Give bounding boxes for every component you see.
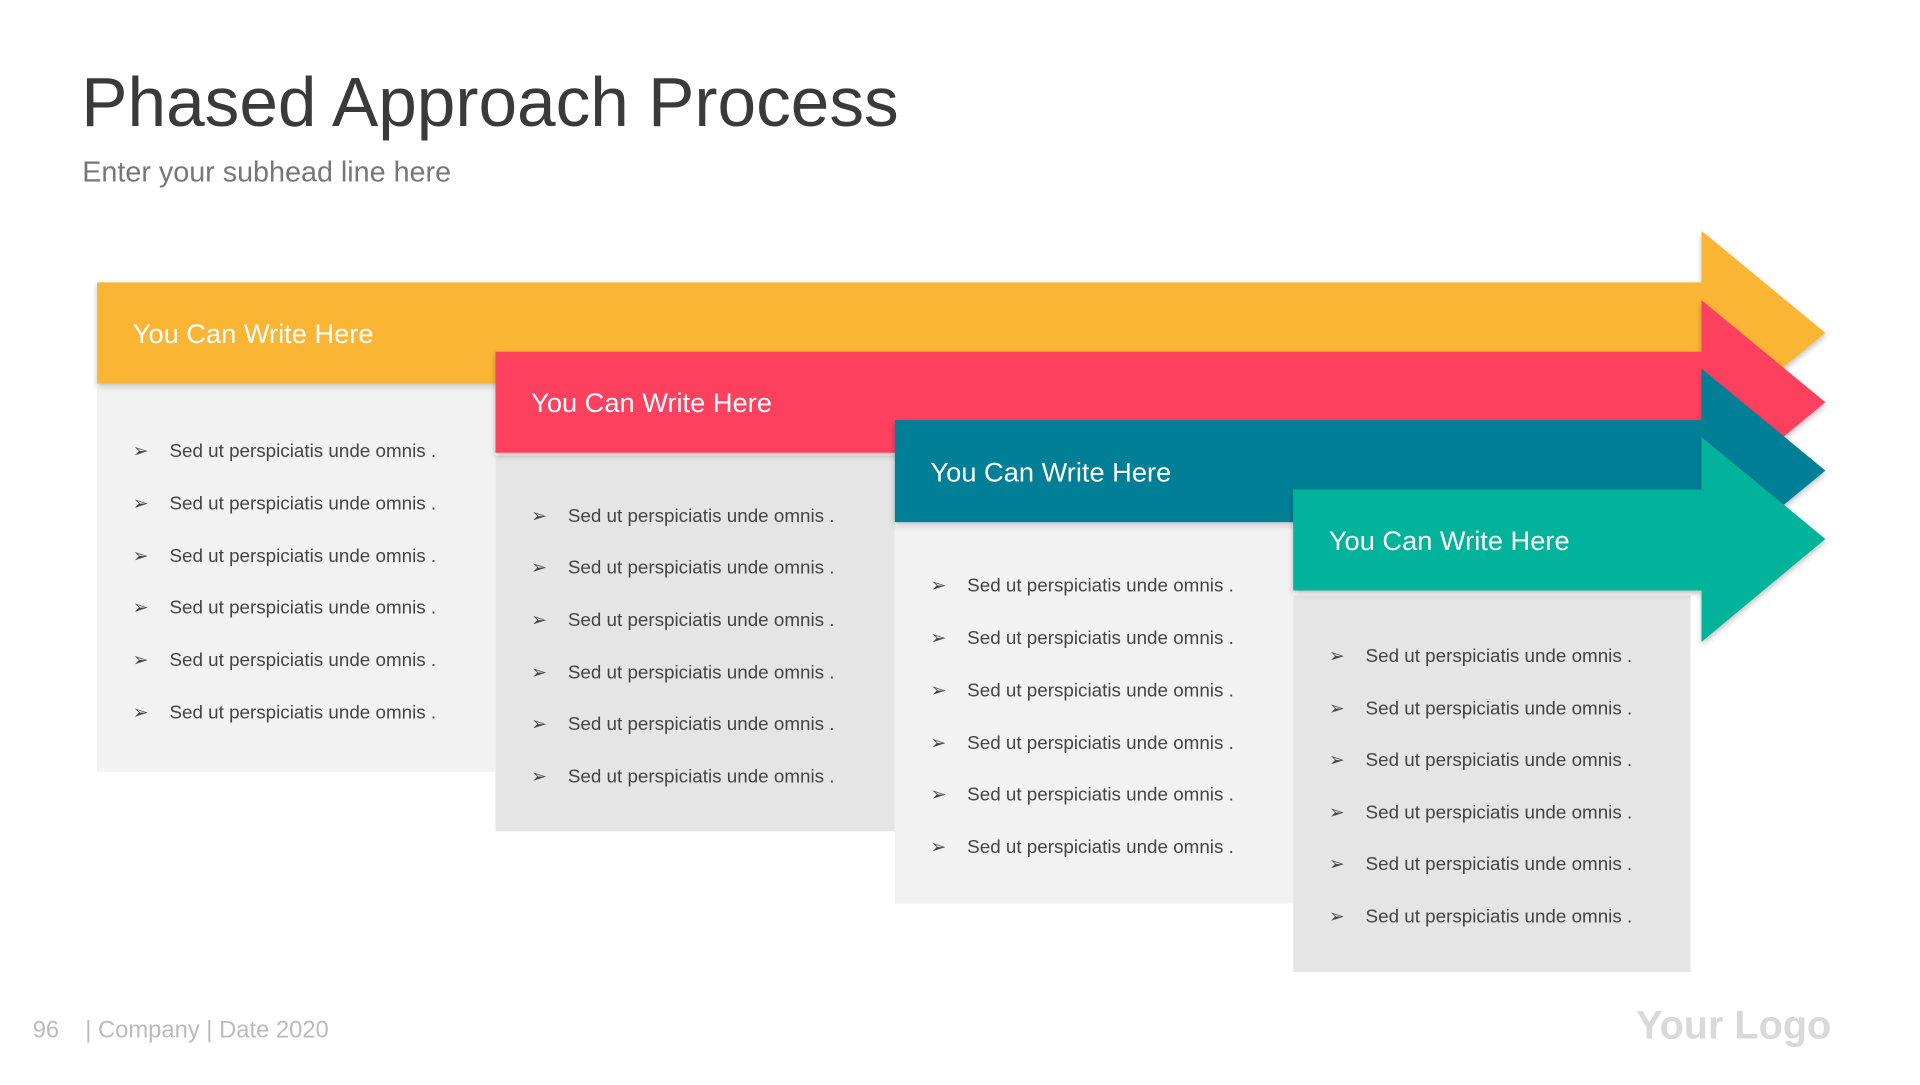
panel: step 1 body: ➢ <box>133 546 149 567</box>
panel: step 2 body: ➢ <box>531 663 547 684</box>
panel: step 3 body: ➢ <box>931 837 946 858</box>
panel: step 3 body: Sed ut perspiciatis unde omnis . <box>967 680 1234 701</box>
panel: step 2 body: ➢ <box>531 610 547 631</box>
panel: step 2 body: ➢ <box>531 558 547 579</box>
panel: step 2 body: Sed ut perspiciatis unde omnis . <box>568 766 834 787</box>
panel: step 1 body: ➢ <box>133 493 149 514</box>
arrow: step 1 yellow <box>97 231 1825 435</box>
panel: step 2 body: ➢ <box>531 506 547 527</box>
panel: step 4 body: ➢ <box>1329 906 1345 927</box>
panel: step 3 body: Sed ut perspiciatis unde omnis . <box>967 575 1234 596</box>
panel: step 4 body: ➢ <box>1329 802 1345 823</box>
arrow: step 1 yellow: You Can Write Here <box>133 318 374 349</box>
panel: step 2 body: ➢ <box>531 714 547 735</box>
arrow: step 3 teal <box>895 369 1825 573</box>
panel: step 2 body: Sed ut perspiciatis unde omnis . <box>568 662 834 683</box>
panel: step 2 body: Sed ut perspiciatis unde omnis . <box>568 557 834 578</box>
panel: step 1 body: Sed ut perspiciatis unde omnis . <box>169 649 436 670</box>
panel: step 4 body: ➢ <box>1329 854 1345 875</box>
panel: step 3 body: Sed ut perspiciatis unde omnis . <box>967 627 1234 648</box>
panel: step 3 body: ➢ <box>931 681 946 702</box>
title: Phased Approach Process <box>81 63 899 141</box>
panel: step 2 body: Sed ut perspiciatis unde omnis . <box>568 713 834 734</box>
panel: step 3 body: Sed ut perspiciatis unde omnis . <box>967 732 1234 753</box>
panel: step 1 body <box>97 387 495 772</box>
panel: step 2 body: Sed ut perspiciatis unde omnis . <box>568 609 834 630</box>
panel: step 3 body <box>895 526 1293 904</box>
panel: step 1 body: ➢ <box>133 597 149 618</box>
arrow: step 3 teal: You Can Write Here <box>931 457 1171 488</box>
panel: step 2 body: Sed ut perspiciatis unde omnis . <box>568 505 834 526</box>
panel: step 1 body: Sed ut perspiciatis unde omnis . <box>169 545 436 566</box>
arrow: step 2 red: You Can Write Here <box>531 387 772 418</box>
arrow: step 4 green: You Can Write Here <box>1329 525 1570 556</box>
panel: step 1 body: Sed ut perspiciatis unde omnis . <box>169 701 436 722</box>
panel: step 1 body: Sed ut perspiciatis unde omnis . <box>169 596 436 617</box>
panel: step 1 body: Sed ut perspiciatis unde omnis . <box>169 492 436 513</box>
panel: step 2 body <box>495 456 895 831</box>
panel: step 1 body: ➢ <box>133 441 149 462</box>
panel: step 3 body: ➢ <box>931 733 946 754</box>
subhead: Enter your subhead line here <box>82 156 451 188</box>
panel: step 3 body: Sed ut perspiciatis unde omnis . <box>967 784 1234 805</box>
panel: step 4 body: Sed ut perspiciatis unde omnis . <box>1366 697 1632 718</box>
panel: step 4 body: ➢ <box>1329 646 1345 667</box>
panel: step 1 body: ➢ <box>133 702 149 723</box>
panel: step 4 body: Sed ut perspiciatis unde omnis . <box>1366 645 1632 666</box>
panel: step 3 body: ➢ <box>931 628 946 649</box>
panel: step 1 body: Sed ut perspiciatis unde omnis . <box>169 440 436 461</box>
arrow: step 2 red <box>495 300 1825 504</box>
panel: step 3 body: ➢ <box>931 785 946 806</box>
panel: step 4 body: Sed ut perspiciatis unde omnis . <box>1366 749 1632 770</box>
panel: step 4 body: ➢ <box>1329 750 1345 771</box>
panel: step 1 body: ➢ <box>133 650 149 671</box>
panel: step 3 body: Sed ut perspiciatis unde omnis . <box>967 836 1234 857</box>
panel: step 4 body: Sed ut perspiciatis unde omnis . <box>1366 853 1632 874</box>
panel: step 4 body: Sed ut perspiciatis unde omnis . <box>1366 801 1632 822</box>
panel: step 4 body <box>1293 595 1691 972</box>
panel: step 3 body: ➢ <box>931 576 946 597</box>
footer: 96 <box>33 1016 59 1043</box>
arrow: step 4 green <box>1293 437 1825 642</box>
panel: step 4 body: Sed ut perspiciatis unde omnis . <box>1366 905 1632 926</box>
footer: | Company | Date 2020 <box>85 1016 329 1043</box>
logo: Your Logo <box>1636 1003 1831 1047</box>
panel: step 2 body: ➢ <box>531 767 547 788</box>
panel: step 4 body: ➢ <box>1329 698 1345 719</box>
